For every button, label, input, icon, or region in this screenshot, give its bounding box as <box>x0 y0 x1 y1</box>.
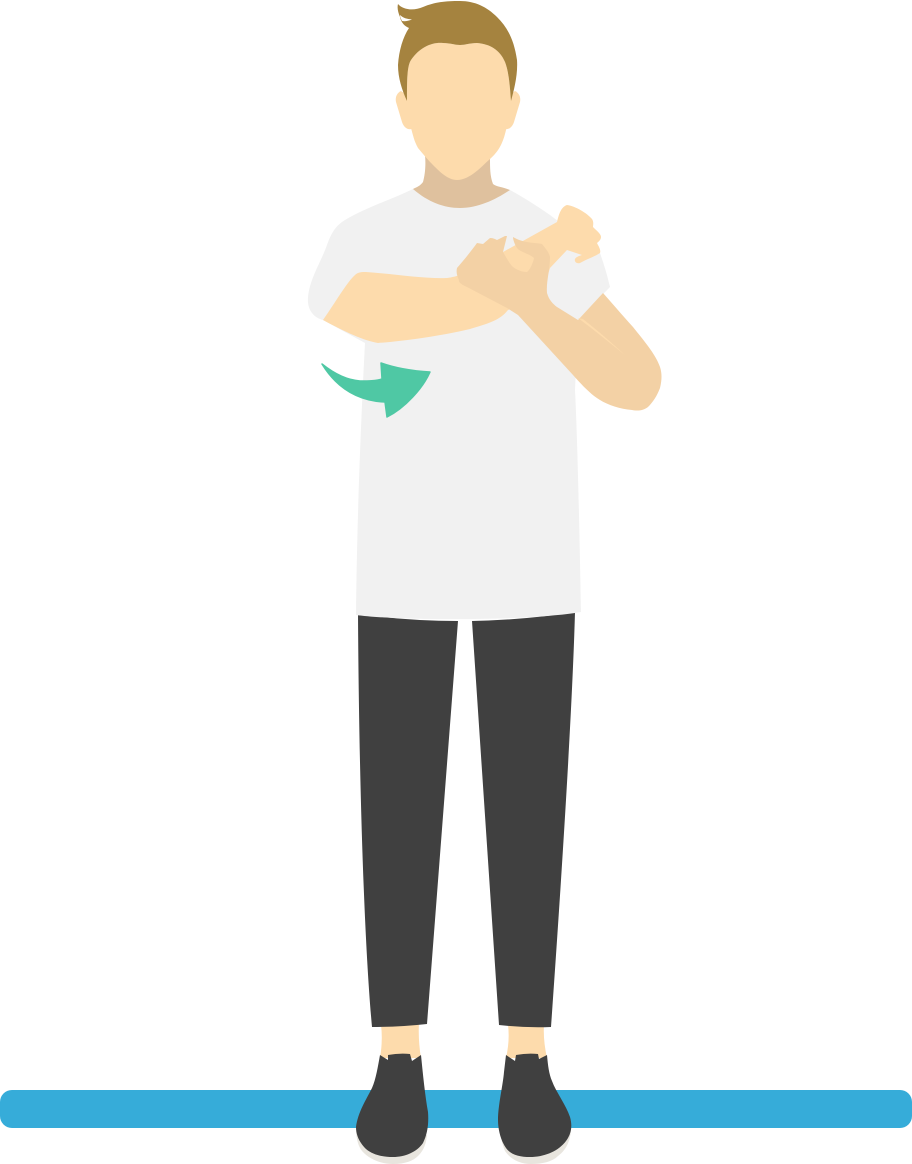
figure: man stretching <box>308 1 662 1164</box>
hair highlight <box>400 15 412 21</box>
ears <box>396 91 520 129</box>
left shoe <box>356 1054 428 1157</box>
raised arm and fist <box>323 205 601 343</box>
ankles <box>380 1023 547 1058</box>
shoe soles <box>356 1128 571 1164</box>
floor mat bar <box>0 1090 912 1128</box>
t-shirt <box>308 189 610 619</box>
arm crease highlight <box>578 318 625 355</box>
hair <box>398 1 517 101</box>
right shoe <box>498 1054 571 1157</box>
arrow: rotation direction <box>322 363 430 417</box>
neck <box>413 155 510 208</box>
forearm and gripping hand <box>457 236 662 411</box>
trousers <box>358 612 575 1027</box>
face <box>407 43 511 180</box>
